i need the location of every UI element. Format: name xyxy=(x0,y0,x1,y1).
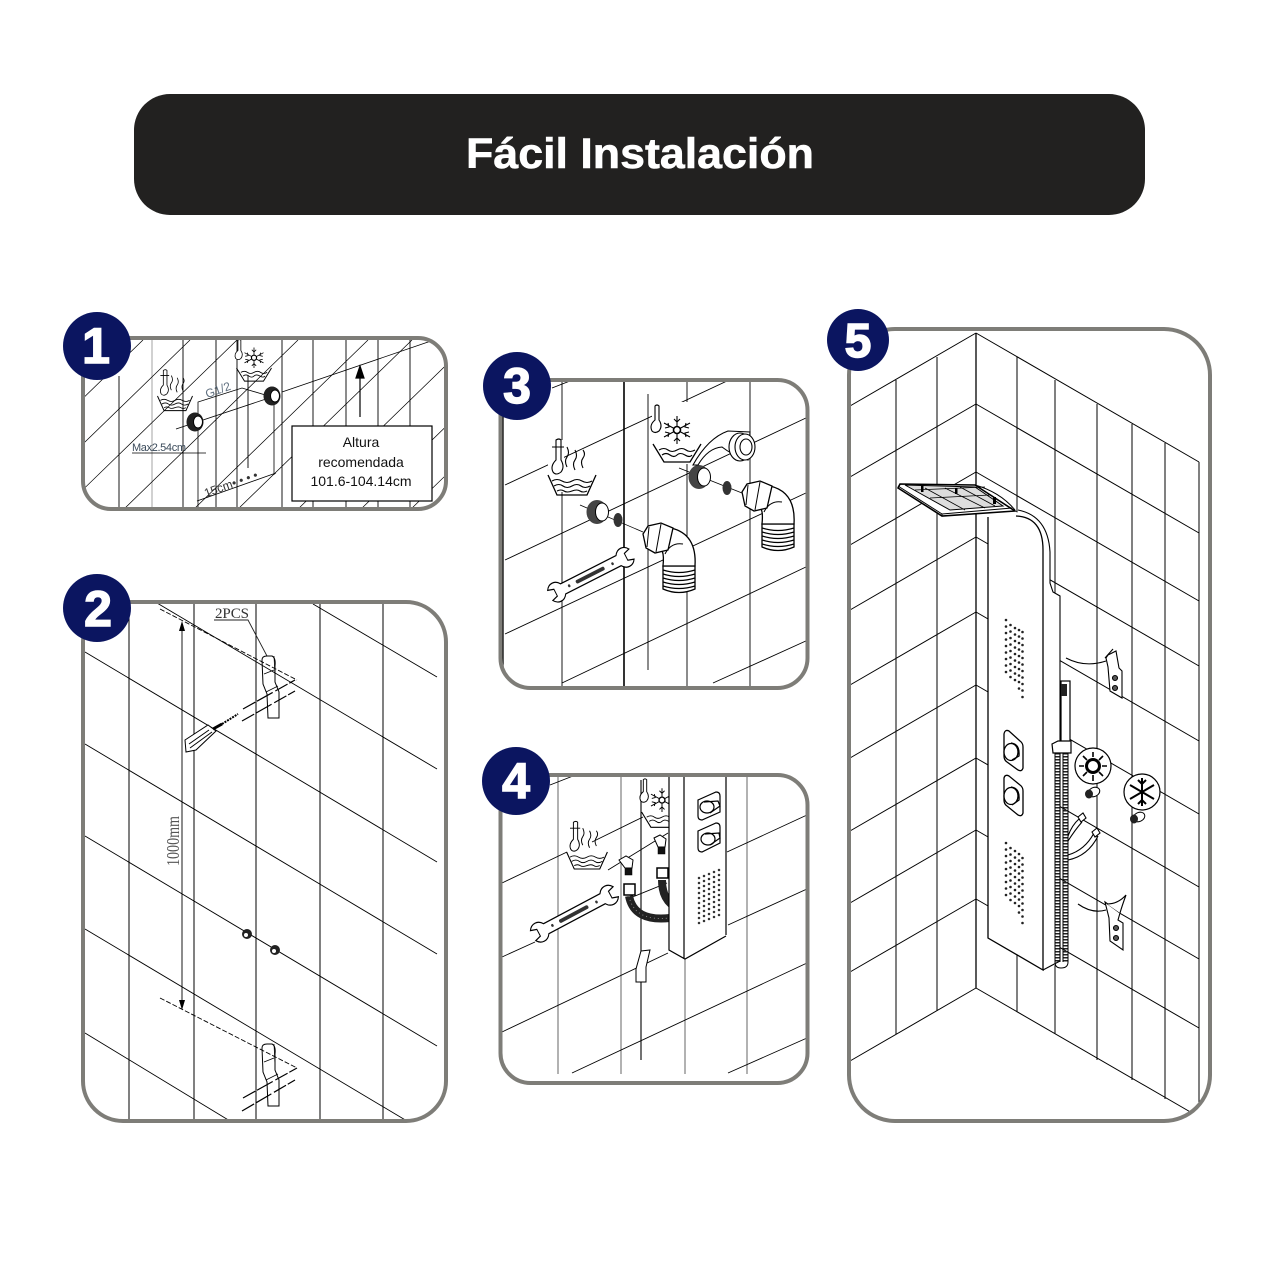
lower jets xyxy=(1006,843,1022,924)
icon: wall bracket xyxy=(636,950,650,982)
icon: bottom screws xyxy=(242,1068,297,1111)
icon: eccentric connector xyxy=(693,431,755,465)
badge: step 4: 4 xyxy=(502,753,530,809)
badge: step 5: 5 xyxy=(845,315,871,368)
icon: right nut and washer xyxy=(688,465,732,495)
icon: cold water disc xyxy=(1124,774,1160,810)
icon: hot water xyxy=(567,821,607,869)
assembly axes xyxy=(580,468,742,532)
icon: cold inlet plug xyxy=(1130,810,1146,824)
panel: step 2 xyxy=(83,602,446,1122)
callout: recommended height: 101.6-104.14cm xyxy=(310,473,412,489)
icon: cold water xyxy=(235,340,272,381)
dimension: 1000mm: 1000mm xyxy=(163,816,183,866)
box background xyxy=(292,426,432,501)
panel: step 5 xyxy=(849,329,1210,1121)
callout: recommended height xyxy=(292,426,432,501)
icon: screwdriver xyxy=(185,714,238,752)
icon: bottom wall bracket xyxy=(1078,895,1126,950)
callout: recommended height: Altura xyxy=(343,434,379,450)
badge: step 3: 3 xyxy=(503,358,531,414)
icon: cold water xyxy=(651,402,701,464)
label: 2PCS: 2PCS xyxy=(215,606,249,622)
icon: lower knob xyxy=(698,823,720,852)
badge: step 2 xyxy=(63,574,131,642)
icon: left fitting xyxy=(186,412,204,432)
callout: recommended height: recomendada xyxy=(318,454,404,470)
icon: hot water xyxy=(548,439,596,495)
icon: left nut and washer xyxy=(586,500,622,527)
upper jets xyxy=(1006,620,1022,700)
icon: right fitting xyxy=(264,386,280,406)
icon: right elbow xyxy=(742,481,794,550)
icon: upper knob xyxy=(698,792,720,820)
badge: step 3 xyxy=(483,352,551,420)
jets xyxy=(699,870,719,926)
badge: step 1: 1 xyxy=(82,318,110,374)
label: spacing: 15cm• • • • xyxy=(202,468,260,500)
panel: step 4 xyxy=(500,775,808,1083)
knob: lower xyxy=(1004,775,1023,816)
icon: hot inlet plug xyxy=(1085,785,1101,799)
icon: bottom bracket xyxy=(262,1044,279,1106)
icon: left elbow xyxy=(643,523,695,592)
title: Fácil Instalación xyxy=(466,130,814,178)
icon: pipe fittings xyxy=(242,929,280,955)
layout guide lines xyxy=(132,341,431,507)
badge: step 1 xyxy=(63,312,131,380)
badge: step 2: 2 xyxy=(84,581,112,637)
icon: left elbow and hose xyxy=(619,856,670,919)
icon: water hoses xyxy=(1068,813,1100,860)
title banner xyxy=(134,94,1145,215)
icon: top screws xyxy=(242,680,295,721)
dimension: 1000mm xyxy=(163,621,185,1010)
panel: step 1 xyxy=(81,336,448,511)
shower panel xyxy=(669,776,726,959)
icon: wrench xyxy=(546,545,636,604)
label: max depth: Max2.54cm xyxy=(132,442,186,454)
badge: step 4 xyxy=(482,747,550,815)
badge: step 5 xyxy=(827,309,889,371)
shower panel xyxy=(898,484,1060,970)
icon: top wall bracket xyxy=(1066,649,1122,698)
icon: hot water xyxy=(157,370,193,411)
icon: cold water xyxy=(640,779,682,827)
icon: top bracket xyxy=(262,656,279,718)
icon: wrench xyxy=(528,883,621,945)
label: 2PCS xyxy=(214,606,267,656)
panel: step 3 xyxy=(500,380,808,689)
icon: right elbow and hose xyxy=(654,835,671,904)
knob: upper xyxy=(1004,730,1023,771)
hand shower and hose xyxy=(1052,681,1071,968)
shower head xyxy=(898,484,1015,516)
arrow: height xyxy=(356,366,364,417)
icon: hot water disc xyxy=(1075,748,1111,784)
label: G1/2: G1/2 xyxy=(203,379,233,401)
